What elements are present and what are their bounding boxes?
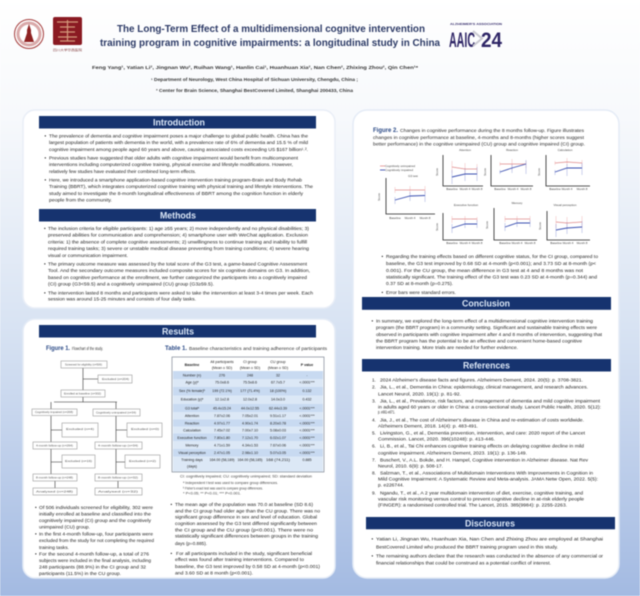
text: conclusion: the BBRT program has the potential to be an effective and convenient home-based cognitive	[376, 338, 582, 344]
text: flowchart bullets: cognitively impaired (CI) group and the cognitively	[39, 518, 152, 523]
table: baseline characteristics: (Mean ± SD)	[212, 366, 232, 370]
text: methods bullets: •	[44, 290, 46, 295]
text: flowchart bullets: 248 participants (88.9%) in the CI group and 32	[39, 564, 146, 569]
table: baseline characteristics: 7.45±7.02	[214, 428, 230, 432]
text: introduction bullets: •	[44, 178, 46, 182]
text: methods bullets: •	[44, 262, 46, 266]
text: references list: Neurol, 2010. 6(9): p. 508-17.	[378, 464, 443, 468]
table: baseline characteristics: 62.44±3.39	[269, 406, 287, 410]
flowchart: Excluded (n=2)	[129, 459, 156, 463]
text: figure 2 bullets: Regarding the training effects based on different cognitive status, for the CI group, compared to	[386, 254, 598, 259]
table footnotes: * P<0.05; ** P<0.01; *** P<0.001.	[183, 492, 241, 496]
table: baseline characteristics: 7.67±0.06	[270, 443, 286, 447]
chart: G3 test: Month 8	[420, 216, 431, 220]
affiliations	[151, 77, 359, 93]
chart: reaction domain: Baseline	[494, 187, 506, 191]
text: methods bullets: (CI) group (G3<59.5) and a cognitively unimpaired (CU) group (G3≥59.5).	[48, 282, 214, 287]
table: baseline characteristics: Sex (% female)ᵇ	[179, 389, 206, 393]
text: conclusion: observed in participants with cognitive impairment after 4 and 8 months of intervention, suggesting that	[376, 332, 603, 337]
chart: memory domain: Month 8	[525, 241, 536, 245]
table: baseline characteristics: <.0001***	[299, 428, 315, 432]
text: table bullets: baseline, the G3 test improved by 0.58 SD at 4-month (p<0.001)	[175, 564, 320, 569]
text: methods bullets: The primary outcome measure was assessed by the total score of the G3 test, a game-based Cognitive Assessment	[48, 262, 308, 266]
caption: Figure 2: changes in cognitive performance at baseline, 4-months and 8-months (higher scores suggest	[373, 135, 585, 140]
chart: calculation domain	[537, 148, 590, 191]
flowchart: Excluded (n=0)	[131, 427, 159, 431]
text: flowchart bullets: unimpaired (CU) group.	[39, 524, 90, 530]
table: baseline characteristics: 0.132	[302, 389, 312, 393]
table: baseline characteristics: 75.0±8.6	[215, 380, 229, 384]
chart: G3 test: Baseline	[389, 216, 401, 220]
table: baseline characteristics: Age (y)ᵃ	[186, 380, 199, 384]
text: introduction bullets: Here, we introduced a smartphone application-based cognitive intervention training program-Brain and Body Rehab	[49, 178, 302, 182]
table: baseline characteristics: Attention	[185, 414, 199, 418]
logo: AAIC 24: AAIC	[449, 29, 475, 52]
table: baseline characteristics: <.0001***	[299, 451, 315, 455]
text: methods bullets: The intervention lasted 8 months and participants were asked to take the intervention at least 3-4 times per week. Each	[48, 290, 313, 295]
text: figure 2 bullets: 0.37 SD at 8-month (p=0.275).	[386, 281, 453, 286]
chart: executive function domain: Score	[435, 223, 439, 231]
table: baseline characteristics: 75.5±8.6	[243, 380, 257, 384]
text: flowchart bullets: Of 506 individuals screened for eligibility, 302 were	[39, 505, 153, 510]
table: baseline characteristics: 177 (71.4%)	[240, 389, 260, 393]
table: baseline characteristics: 4.71±1.59	[214, 443, 230, 447]
chart: G3 test	[377, 164, 435, 220]
text: flowchart bullets: training tasks.	[39, 545, 69, 550]
chart: visual perception domain: Score	[538, 222, 542, 230]
text: table bullets: For all participants included in the study, significant beneficial	[176, 551, 312, 556]
text: table bullets: significant group difference in sex and level of education. Global	[175, 515, 317, 520]
chart: calculation domain: Month 4	[562, 187, 573, 191]
table: baseline characteristics: P value	[301, 363, 313, 367]
table footnotes	[180, 474, 312, 496]
heading: Results	[39, 325, 316, 338]
logo: Sichuan University red square: 四川大学华西医院	[53, 47, 82, 52]
text: references list: 2.	[372, 385, 376, 390]
chart: visual perception domain: Visual perception	[554, 203, 577, 207]
table: baseline characteristics: G3 totalᵃ	[185, 406, 200, 410]
text: flowchart bullets: participants (11.5%) in the CU group.	[39, 571, 121, 576]
text: table bullets: days (p=0.885).	[175, 541, 207, 546]
text: methods bullets: •	[44, 226, 46, 231]
table: baseline characteristics: <.0001***	[299, 421, 315, 425]
flowchart: 8-month follow-up (n=32)	[98, 476, 138, 480]
table: baseline characteristics: 12.1±2.8	[215, 398, 229, 402]
text: references list: 2024 Alzheimer's disease facts and figures. Alzheimers Dement, 2024. 20(5): p. 3708-3821.	[380, 378, 583, 383]
text: methods bullets: The inclusion criteria for eligible participants: 1) age ≥55 years; 2) move independently and no physical disabilities; 3)	[48, 226, 309, 231]
affiliations: ¹ Department of Neurology, West China Hospital of Sichuan University, Chengdu, China ;	[151, 77, 359, 82]
caption: Figure 2: better performance) in the cognitive unimpaired (CU) group and cognitive impaired (CI) group.	[373, 141, 585, 146]
table: baseline characteristics: -	[306, 373, 308, 377]
flowchart: Excluded (n=204)	[102, 377, 129, 381]
chart: attention domain: Month 4	[460, 187, 471, 191]
heading: Conclusion: Conclusion	[462, 299, 510, 309]
text: table bullets: effect was found after training interventions. Compared to	[175, 557, 304, 562]
chart: attention domain: Attention	[459, 148, 471, 152]
text: table bullets: and 3.60 SD at 8 month (p<0.001).	[175, 570, 253, 575]
heading: Methods: Methods	[160, 210, 196, 220]
logo: university seal	[14, 20, 44, 48]
chart: calculation domain: Score	[537, 168, 541, 176]
chart: G3 test: Month 4	[405, 216, 416, 220]
text: flowchart bullets: excluded from the study for not completing the required	[39, 538, 154, 543]
table: baseline characteristics: 0.432	[302, 398, 312, 402]
table: baseline characteristics: 199 (72.1%)	[212, 389, 232, 393]
chart: visual perception domain	[538, 203, 590, 245]
caption: Figure 1	[46, 346, 103, 352]
heading: Conclusion	[362, 297, 611, 310]
text: table bullets: cognition assessed by the G3 test differed significantly between	[175, 521, 317, 526]
flowchart: Excluded (n=4)	[66, 427, 94, 431]
chart: memory domain	[485, 201, 537, 245]
text: references list: Mild Cognitive Impairment: A Systematic Review and Meta-analysis. JAMA Netw Open, 2022. 5(5):	[378, 476, 598, 482]
caption: Table 1: Table 1.	[165, 346, 187, 352]
text: flowchart bullets: •	[35, 552, 37, 556]
text: figure 2 bullets: Error bars were standard errors.	[386, 290, 456, 295]
heading: Disclosures	[366, 517, 615, 529]
text: introduction bullets: Training (BBRT), which integrates computerized cognitive training with physical training and lifestyle interventions. The	[49, 184, 313, 189]
table: baseline characteristics: 7.00±7.10	[242, 428, 258, 432]
text: references list: Jia, J., et al., The cost of Alzheimer's disease in China and re-estimation of costs worldwide.	[380, 418, 584, 422]
text: table bullets: the CI group and the CU group (p<0.001). There were no	[175, 528, 313, 533]
text: introduction bullets: Previous studies have suggested that older adults with cognitive impairment would benefit from multicomponent	[49, 156, 299, 160]
text: flowchart bullets: subjects were included in the final analysis, including	[39, 558, 151, 563]
text: conclusion: In summary, we explored the long-term effect of a multidimensional cognitive intervention training	[376, 318, 593, 324]
text: references list: Alzheimers Dement, 2018. 14(4): p. 483-491.	[378, 424, 478, 428]
chart: memory domain: Memory	[512, 201, 523, 205]
text: introduction bullets: •	[44, 134, 46, 138]
text: introduction bullets: The prevalence of dementia and cognitive impairment poses a major challenge to global public health. China has the	[49, 134, 308, 138]
table: baseline characteristics: <.0001***	[299, 436, 315, 440]
table: baseline characteristics: 5.08±0.03	[270, 428, 286, 432]
heading: Introduction: Introduction	[153, 118, 205, 128]
heading: Introduction	[39, 116, 316, 128]
text: introduction bullets	[44, 134, 313, 203]
caption: Figure 1: Figure 1.	[46, 346, 70, 352]
table: baseline characteristics: Number (n)	[183, 373, 201, 377]
flowchart: Excluded (n=16)	[65, 459, 92, 463]
text: references list: 6.	[372, 444, 376, 448]
text: methods bullets: Tool. And the secondary outcome measures included composite scores for six cognitive domains on G3. In addition,	[48, 268, 310, 273]
text: introduction bullets: •	[44, 156, 46, 160]
flowchart: Cognitively unimpaired (n=34)	[96, 410, 136, 414]
text: table bullets	[170, 502, 320, 575]
text: references list: Li, B., et al., Tai Chi enhances cognitive training effects on delaying cognitive decline in mild	[380, 444, 584, 448]
table: baseline characteristics: Calculation	[183, 428, 201, 432]
text: methods bullets: visual or communication impairment.	[48, 253, 128, 258]
text: conclusion: •	[372, 318, 374, 324]
table: baseline characteristics: Visual perception	[178, 451, 206, 455]
text: introduction bullets: study aimed to investigate the 8-month longitudinal effectiveness of BBRT among the cognition function in elderly	[49, 191, 304, 196]
text: conclusion	[372, 318, 603, 350]
table: baseline characteristics: CI group	[243, 360, 257, 364]
table: baseline characteristics: Memory	[186, 443, 199, 447]
table: baseline characteristics: (Mean ± SD)	[268, 366, 288, 370]
chart: visual perception domain: Month 8	[577, 241, 588, 245]
text: figure 2 bullets: •	[382, 254, 384, 259]
table: baseline characteristics: Executive function	[177, 436, 207, 440]
table: baseline characteristics: 164.00 (58,185)	[238, 458, 262, 462]
text: flowchart bullets: initially enrolled at baseline and classified into the	[39, 512, 151, 516]
table: baseline characteristics: 7.87±2.06	[214, 414, 230, 418]
chart: reaction domain: Month 4	[508, 187, 519, 191]
table: baseline characteristics: <.0001***	[299, 414, 315, 418]
text: references list: Commission. Lancet, 2020. 396(10248): p. 413-446.	[378, 436, 495, 442]
text: references list: 3.	[372, 399, 376, 404]
text: introduction bullets: people from the community.	[49, 198, 112, 203]
logo: AAIC 24: 24	[481, 29, 502, 52]
text: references list: Jia, L., et al., Prevalence, risk factors, and management of dementia and mild cognitive impairment	[380, 399, 601, 404]
text: disclosures	[372, 536, 603, 566]
flowchart: 4-month follow-up (n=264)	[36, 444, 73, 448]
caption: Table 1	[165, 346, 328, 352]
text: references list: Jia, L., et al., Dementia in China: epidemiology, clinical management, and research advances.	[380, 385, 588, 390]
heading: Results: Results	[162, 326, 194, 336]
title: training program in cognitive impairments: a longitudinal study in China	[100, 37, 440, 49]
text: table bullets: The mean age of the population was 70.0 at baseline (SD 8.6)	[175, 502, 313, 507]
text: introduction bullets: relatively few studies have evaluated their combined long-term effects.	[49, 169, 196, 174]
table: baseline characteristics: 168 (74,211)	[266, 458, 290, 462]
chart: reaction domain: Month 8	[521, 187, 532, 191]
table: baseline characteristics: Education (y)ᵃ	[181, 398, 204, 402]
table: baseline characteristics: CU group	[270, 360, 286, 364]
chart: executive function domain: Month 4	[460, 241, 471, 245]
table: baseline characteristics: 164.00 (58,189)	[210, 458, 234, 462]
text: figure 2 bullets: •	[382, 290, 384, 295]
chart: memory domain: Score	[485, 221, 489, 229]
table: baseline characteristics: 7.05±2.01	[242, 414, 258, 418]
text: flowchart bullets: •	[35, 532, 37, 536]
text: methods bullets: preserved abilities for communication and comprehension; 4) smartphone user with WeChat application. Exclusion	[48, 232, 308, 238]
title: The Long-Term Effect of a multidimensional cognitve intervention	[117, 23, 425, 35]
table: baseline characteristics: 276	[219, 373, 225, 377]
table: baseline characteristics: <.0001***	[299, 380, 315, 384]
table: baseline characteristics: 2.98±1.10	[242, 451, 258, 455]
panel: introduction and methods	[23, 110, 335, 308]
text: references list: Livingston, G., et al., Dementia prevention, intervention, and care: 2020 report of the Lancet	[380, 430, 586, 436]
text: disclosures: The remaining authors declare that the research was conducted in the absence of any commercial or	[376, 554, 603, 558]
text: references list: vascular risk monitoring versus control to prevent cognitive decline in at-risk elderly people	[378, 496, 584, 502]
table: baseline characteristics: 2.47±1.05	[214, 451, 230, 455]
logo: AAIC 24: ALZHEIMER'S ASSOCIATION	[450, 22, 502, 26]
table: baseline characteristics: Baseline	[185, 363, 199, 367]
chart: reaction domain: Reaction	[506, 148, 518, 152]
text: references list: in adults aged 60 years or older in China: a cross-sectional study. Lancet Public Health, 2020. 5(12):	[378, 404, 601, 410]
text: figure 2 bullets: 0.001). For the CU group, the mean difference in G3 test at 4 and 8 months was not	[386, 268, 584, 273]
text: table bullets: •	[170, 502, 172, 507]
table: baseline characteristics: 18 (100%)	[270, 389, 286, 393]
text: references list: Salzman, T., et al., Associations of Multidomain Interventions With Improvements in Cognition in	[380, 470, 593, 476]
logo: Sichuan University red square	[53, 17, 82, 52]
flowchart: Cognitively impaired (n=268)	[35, 410, 73, 414]
chart: memory domain: Baseline	[499, 241, 511, 245]
table: baseline characteristics: (Mean ± SD)	[240, 366, 260, 370]
chart: attention domain: Month 8	[472, 187, 483, 191]
table: baseline characteristics: 12.0±2.8	[243, 398, 257, 402]
text: table bullets: •	[170, 551, 172, 556]
text: figure 2 bullets: baseline, the G3 test improved by 0.68 SD at 4-month (p<0.001); and 3.73 SD at 8-month (p<	[386, 261, 596, 266]
heading: Disclosures: Disclosures	[465, 518, 515, 528]
text: references list: (FINGER): a randomised controlled trial. The Lancet, 2015. 385(9984): p. 2255-2263.	[378, 502, 567, 508]
caption: Figure 2: Figure 2.	[373, 128, 398, 134]
flowchart: Enrolled at baseline (n=302)	[64, 392, 101, 396]
table: baseline characteristics: 9.51±1.17	[270, 414, 286, 418]
flowchart: Analysed (n=248)	[36, 490, 73, 494]
title	[100, 23, 440, 49]
chart: calculation domain: Month 8	[577, 187, 588, 191]
table: baseline characteristics: 45.4±15.24	[213, 406, 231, 410]
chart: calculation domain: Baseline	[549, 187, 561, 191]
chart: executive function domain	[435, 203, 483, 245]
chart: calculation domain: Calculation	[558, 148, 573, 152]
flowchart: 8-month follow-up (n=248)	[36, 476, 73, 480]
table footnotes: ᵇ Fisher's exact test was used to compare group differences.	[183, 486, 263, 490]
flowchart: 4-month follow-up (n=34)	[98, 444, 138, 448]
affiliations: ² Center for Brain Science, Shanghai BestCovered Limited, Shanghai 200433, China	[156, 88, 354, 93]
text: table bullets: and the CI group had older age than the CU group. There was no	[175, 509, 320, 514]
table: baseline characteristics: Training days	[181, 458, 203, 462]
flowchart	[32, 361, 162, 495]
text: methods bullets: criteria: 1) the absence of complete cognitive assessments; 2) unwillingness to continue training and inability to fulfill	[48, 239, 307, 244]
caption: Figure 1: Flowchart of the study.	[72, 346, 103, 351]
text: references list: 8.	[372, 470, 376, 476]
text: flowchart bullets: For the second 4-month follow-up, a total of 276	[39, 552, 149, 556]
text: figure 2 bullets	[382, 254, 598, 295]
flowchart: Analysed (n=32)	[98, 490, 138, 494]
text: disclosures: •	[372, 536, 374, 542]
table: baseline characteristics: 5.07±3.05	[270, 451, 286, 455]
chart: executive function domain: Executive function	[454, 203, 478, 207]
text: references list	[372, 378, 601, 508]
text: figure 2 bullets: statistically significant. The training effect of the G3 test was 0.23 SD at 4-month (p=0.344) and	[386, 274, 597, 280]
chart: G3 test: Cognitively impaired	[385, 168, 413, 172]
text: references list: 9.	[372, 490, 376, 496]
text: references list: p. e226744.	[378, 482, 404, 488]
text: introduction bullets: interventions including computerized cognitive training, physical exercise and lifestyle modifications. However,	[49, 162, 293, 167]
text: methods bullets	[44, 226, 313, 302]
text: references list: p. e661-e671.	[378, 410, 395, 414]
table: baseline characteristics: All participants	[210, 360, 234, 364]
table: baseline characteristics	[172, 357, 324, 472]
table footnotes: CI: cognitively impaired; CU: cognitively unimpaired; SD: standard deviation	[180, 474, 312, 478]
table: baseline characteristics: 14.0±3.0	[271, 398, 285, 402]
table footnotes: ᵃ Independent t test was used to compare group differences.	[183, 481, 278, 485]
text: disclosures: Yatian Li, Jingnan Wu, Huanhuan Xia, Nan Chen and Zhixing Zhou are employed at Shanghai	[376, 536, 603, 542]
text: references list: 4.	[372, 418, 376, 422]
table: baseline characteristics: 67.7±5.7	[271, 380, 285, 384]
text: flowchart bullets: •	[35, 505, 37, 510]
panel: results	[23, 319, 335, 578]
table: baseline characteristics: Reaction	[185, 421, 199, 425]
text: flowchart bullets: In the first 4-month follow-up, four participants were	[39, 532, 153, 536]
text: references list: Lancet Neurol, 2020. 19(1): p. 81-92.	[378, 392, 461, 396]
text: introduction bullets: largest population of patients with dementia in the world, with a prevalence rate of 6% of dementia and 15.5 % of mild	[49, 140, 308, 145]
chart: attention domain: Score	[435, 168, 439, 176]
table: baseline characteristics: 7.80±1.80	[214, 436, 230, 440]
heading: References	[362, 359, 611, 372]
text: references list: 5.	[372, 430, 376, 436]
text: references list: 7.	[372, 458, 376, 462]
authors: Feng Yang¹, Yatian Li², Jingnan Wu², Ruihan Wang¹, Hanlin Cai¹, Huanhuan Xia², Nan Chen², Zhixing Zhou², Qin Chen¹*	[92, 65, 418, 71]
chart: G3 test: Cognitively unimpaired	[385, 164, 415, 168]
caption: Table 1: Baseline characteristics and training adherence of participants	[189, 346, 328, 351]
panel: figure 2, conclusion, references, disclosures	[353, 110, 619, 578]
flowchart: Screened for eligibility (n=506)	[65, 362, 102, 366]
table: baseline characteristics: <.0001***	[299, 443, 315, 447]
table: baseline characteristics: 32	[276, 373, 280, 377]
text: table bullets: statistically significant differences between groups in the training	[175, 534, 318, 539]
table: baseline characteristics: 6.02±1.07	[270, 436, 286, 440]
table: baseline characteristics: 248	[247, 373, 253, 377]
table: baseline characteristics: 4.97±1.77	[214, 421, 230, 425]
table: baseline characteristics: 4.34±1.53	[242, 443, 258, 447]
text: flowchart bullets	[35, 505, 154, 576]
text: disclosures: financial relationships that could be construed as a potential conflict of interest.	[376, 560, 551, 566]
text: introduction bullets: cognitive impairment among people aged 60 years and above, causing associated costs exceeding US $167 billion¹˒².	[49, 147, 308, 152]
chart: visual perception domain: Month 4	[563, 241, 574, 245]
chart: G3 test: Score	[377, 193, 381, 201]
text: conclusion: program (the BBRT program) in a community setting. Significant and sustainable training effects were	[376, 325, 597, 330]
text: methods bullets: based on cognitive performance at the enrollment, we further categorized the participants into a cognitively impaired	[48, 275, 307, 280]
chart: visual perception domain: Baseline	[550, 241, 562, 245]
chart: reaction domain	[483, 148, 533, 191]
chart: executive function domain: Baseline	[446, 241, 458, 245]
text: disclosures: •	[372, 554, 374, 558]
chart: attention domain	[435, 148, 483, 191]
text: conclusion: intervention training. More trials are needed for further evidence.	[376, 345, 518, 350]
chart: executive function domain: Month 8	[472, 241, 483, 245]
chart: attention domain: Baseline	[446, 187, 458, 191]
text: methods bullets: required training tasks; 3) severe or unstable medical disease preventing from training conditions; 4) severe hearing	[48, 246, 309, 251]
caption: Figure 2	[373, 128, 585, 146]
heading: References: References	[463, 360, 510, 370]
table: baseline characteristics: 44.0±12.55	[241, 406, 259, 410]
table: baseline characteristics: 7.12±1.70	[242, 436, 258, 440]
caption: Figure 2: Changes in cognitive performance during the 8 months follow-up. Figure illustrates	[400, 128, 585, 133]
chart: G3 test: G3 test	[408, 174, 418, 178]
text: methods bullets: session was around 15-25 minutes and consists of four daily tasks.	[48, 297, 196, 302]
text: references list: cognitive impairment. Alzheimers Dement, 2023. 19(1): p. 136-149.	[378, 450, 527, 456]
text: disclosures: BestCovered Limited who produced the BBRT training program used in this study.	[376, 544, 558, 550]
table: baseline characteristics: (days)	[187, 464, 197, 468]
table: baseline characteristics: <.0001***	[299, 406, 315, 410]
text: references list: Ngandu, T., et al., A 2 year multidomain intervention of diet, exercise, cognitive training, and	[380, 490, 583, 496]
text: references list: 1.	[372, 378, 376, 383]
table: baseline characteristics: 4.90±1.74	[242, 421, 258, 425]
chart: memory domain: Month 4	[512, 241, 523, 245]
table: baseline characteristics: 0.885	[302, 458, 312, 462]
heading: Methods	[39, 209, 316, 222]
text: references list: Buschert, V., A.L. Bokde, and H. Hampel, Cognitive intervention in Alzheimer disease. Nat Rev	[380, 458, 589, 462]
chart: reaction domain: Score	[483, 168, 487, 176]
table: baseline characteristics: 8.20±0.78	[270, 421, 286, 425]
